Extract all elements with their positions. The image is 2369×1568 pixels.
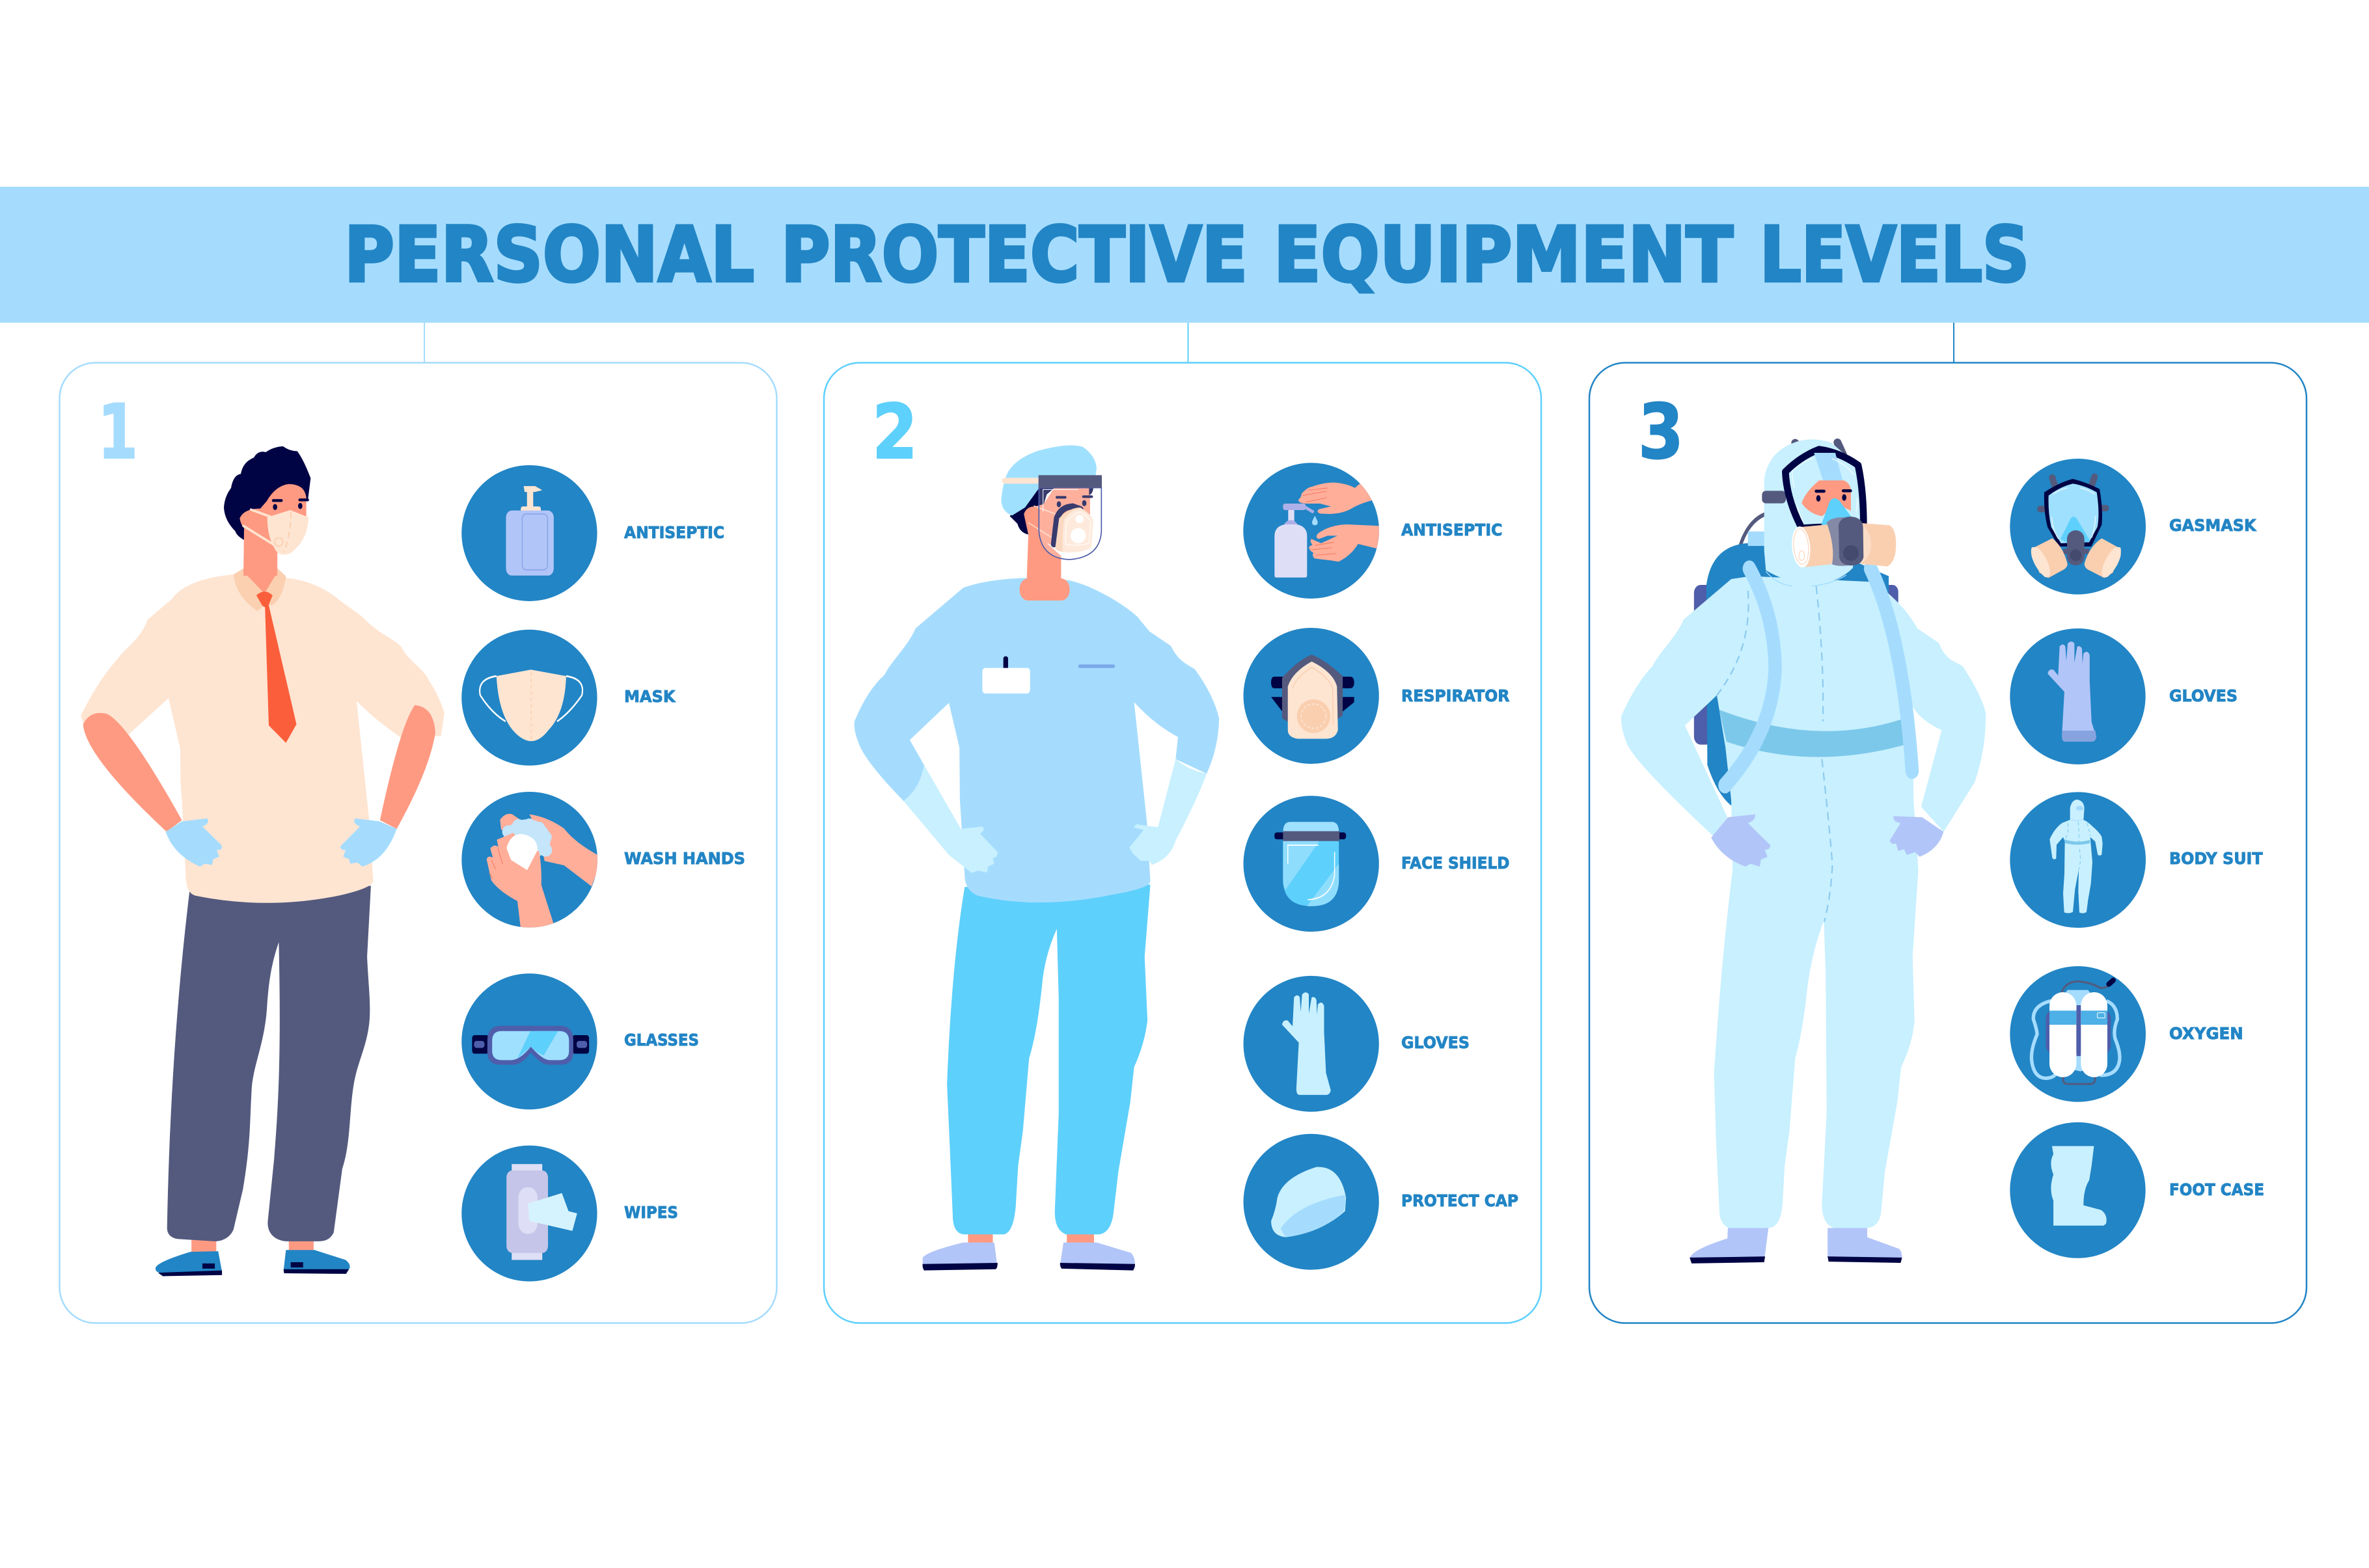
label: face shield: FACE SHIELD	[1401, 854, 1510, 872]
title banner	[0, 187, 2369, 323]
icon: foot case	[2010, 1122, 2146, 1258]
icon: respirator	[1244, 628, 1379, 764]
figure: office worker	[81, 530, 445, 1276]
title	[344, 210, 2029, 299]
icon: wash hands	[461, 792, 599, 928]
number 3: 3	[1638, 388, 1684, 476]
icon: oxygen tanks	[2010, 966, 2146, 1102]
label: glasses: GLASSES	[624, 1031, 699, 1049]
label: foot case: FOOT CASE	[2169, 1180, 2264, 1199]
figure: hazmat suit with backpack	[1621, 514, 1986, 1264]
connector: banner to panel 2	[1187, 323, 1188, 363]
icon: wipes	[461, 1146, 597, 1282]
title: PROTECTIVE	[781, 210, 1248, 299]
icon: gasmask	[2010, 459, 2146, 595]
label: respirator: RESPIRATOR	[1401, 686, 1510, 705]
icon: gloves	[1244, 976, 1379, 1112]
label: gloves: GLOVES	[2169, 686, 2238, 705]
icon: glasses	[461, 973, 597, 1109]
head: respirator and face shield	[1001, 445, 1102, 560]
number 1: 1	[98, 388, 138, 476]
icon: body suit	[2010, 792, 2146, 928]
panel: level 3	[1589, 363, 2307, 1323]
label: antiseptic: ANTISEPTIC	[624, 523, 724, 542]
number 2: 2	[872, 388, 918, 476]
figure: medical worker	[855, 527, 1219, 1271]
head: surgical mask wearer	[224, 446, 310, 576]
connector: banner to panel 3	[1953, 323, 1954, 363]
title: LEVELS	[1760, 210, 2029, 299]
label: oxygen: OXYGEN	[2169, 1024, 2243, 1043]
head: hood and gas mask	[1762, 439, 1896, 586]
label: antiseptic: ANTISEPTIC	[1401, 520, 1502, 539]
icon: gloves	[2010, 629, 2146, 764]
icon: mask	[461, 630, 597, 766]
connector: banner to panel 1	[424, 323, 425, 363]
label: body suit: BODY SUIT	[2169, 849, 2263, 868]
icon: antiseptic bottle	[461, 465, 597, 601]
label: wash hands: WASH HANDS	[624, 849, 745, 868]
label: mask: MASK	[624, 687, 676, 706]
panel: level 1	[60, 363, 777, 1323]
icon: antiseptic dispenser	[1243, 463, 1381, 599]
label: protect cap: PROTECT CAP	[1401, 1191, 1518, 1210]
panel: level 2	[824, 363, 1541, 1323]
label: wipes: WIPES	[624, 1203, 678, 1222]
title: PERSONAL	[344, 210, 754, 299]
label: gloves: GLOVES	[1401, 1033, 1470, 1052]
title: EQUIPMENT	[1274, 210, 1733, 299]
icon: protect cap	[1244, 1134, 1379, 1270]
icon: face shield	[1244, 796, 1379, 932]
label: gasmask: GASMASK	[2169, 516, 2257, 535]
